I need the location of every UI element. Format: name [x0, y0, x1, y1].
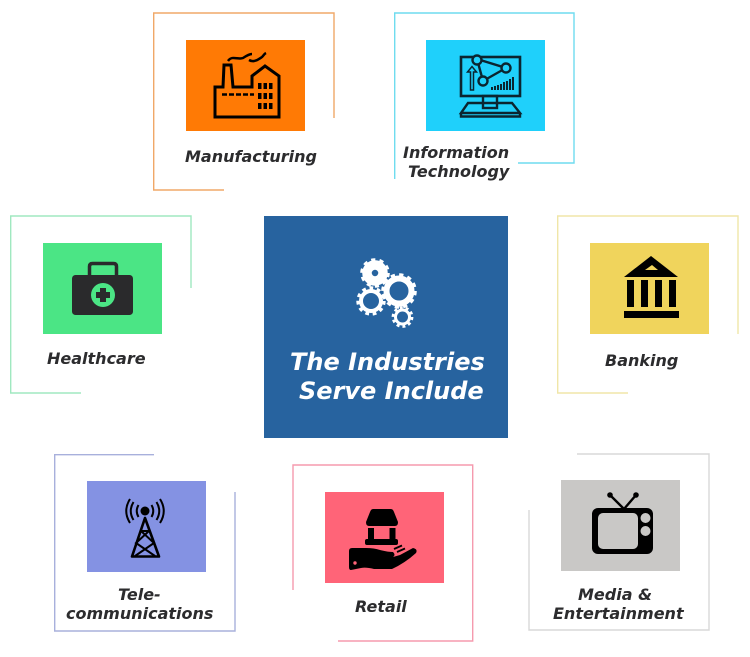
panel: telecommunications: [55, 455, 235, 631]
icon: medical kit: [72, 264, 133, 315]
label: Entertainment: [553, 604, 685, 623]
panel: information technology: [395, 13, 574, 181]
panel: healthcare: [11, 216, 191, 393]
label: [66, 585, 213, 623]
label: Banking: [605, 351, 678, 370]
label: Information: [403, 143, 509, 162]
icon: television: [592, 492, 653, 554]
icon: hand holding shop: [349, 509, 417, 570]
panel: retail: [293, 465, 473, 641]
panel: media and entertainment: [529, 454, 709, 630]
icon: bank: [624, 256, 679, 318]
panel: banking: [558, 216, 738, 393]
panel: manufacturing: [154, 13, 334, 190]
label: Media &: [578, 585, 652, 604]
icon: gears: [358, 260, 415, 326]
panel: center: [264, 216, 508, 438]
label: communications: [66, 604, 213, 623]
label: Manufacturing: [185, 147, 317, 166]
label: Healthcare: [47, 349, 146, 368]
label: Retail: [355, 597, 407, 616]
icon: monitor with chart: [461, 56, 520, 116]
heading: [290, 348, 485, 405]
heading: The Industries: [290, 348, 485, 376]
heading: Serve Include: [299, 377, 484, 405]
label: Technology: [408, 162, 510, 181]
label: [553, 585, 685, 623]
label: Tele-: [118, 585, 161, 604]
icon: factory: [215, 53, 279, 117]
label: [403, 143, 510, 181]
icon: radio tower: [126, 499, 164, 556]
